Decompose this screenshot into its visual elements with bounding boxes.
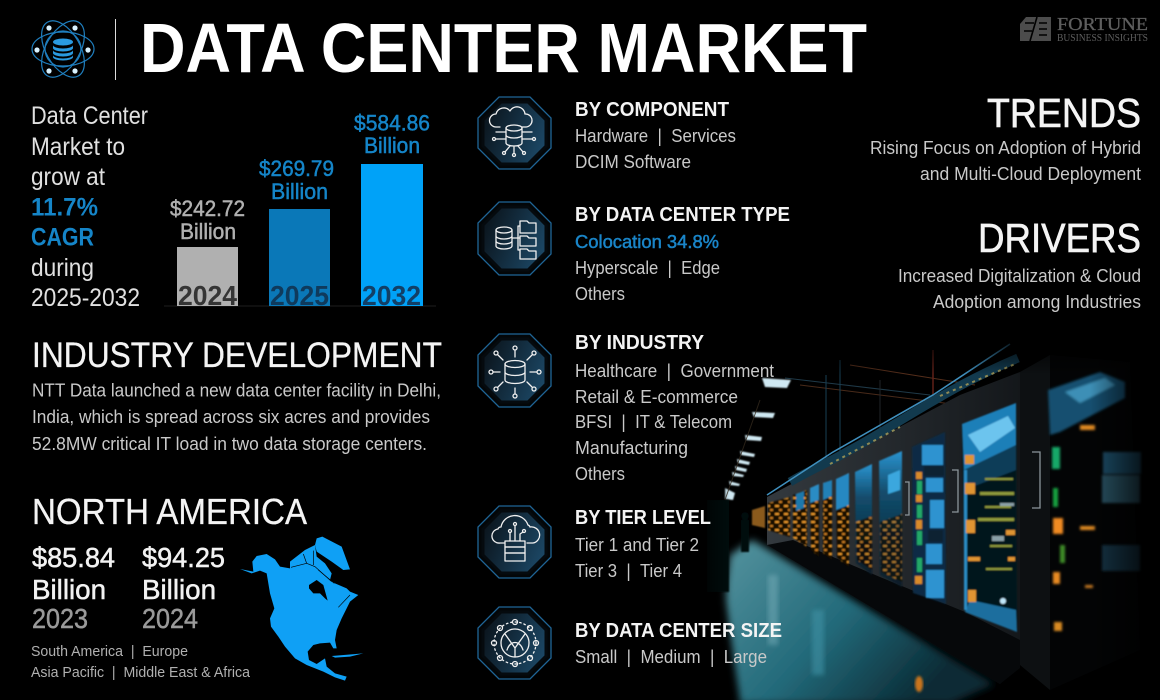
items: Tier 1 and Tier 2 xyxy=(575,535,699,555)
blurred foreground rack xyxy=(1048,372,1141,631)
stat 2023: Billion xyxy=(32,574,106,605)
stat 2023: 2023 xyxy=(32,603,88,634)
bar 2032 xyxy=(354,110,430,311)
panel: drivers xyxy=(898,215,1141,312)
body text: India, which is spread across six acres and provides xyxy=(32,407,430,427)
photo edge fades xyxy=(690,335,1160,700)
CAGR text block xyxy=(31,102,148,312)
body text xyxy=(870,138,1141,184)
far racks with orange lights xyxy=(752,497,790,537)
stat 2024: Billion xyxy=(142,574,216,605)
bar 2032: Billion xyxy=(364,133,420,158)
bar 2025 xyxy=(259,156,334,311)
panel: by data center type xyxy=(478,202,790,304)
heading: NORTH AMERICA xyxy=(32,491,307,532)
items xyxy=(575,361,774,484)
stat 2023 xyxy=(32,542,115,634)
people silhouettes xyxy=(707,500,749,592)
panel: north america xyxy=(31,491,363,681)
logo icon: atom with database xyxy=(32,14,94,84)
icon: cloud server xyxy=(478,506,551,578)
heading: DRIVERS xyxy=(978,215,1141,261)
icon: database folders xyxy=(478,202,551,275)
bar 2024: 2024 xyxy=(178,280,237,311)
items: Manufacturing xyxy=(575,438,688,458)
stat 2024: 2024 xyxy=(142,603,198,634)
heading: TRENDS xyxy=(987,90,1141,136)
bar 2025: Billion xyxy=(271,179,328,204)
bar chart: market size xyxy=(164,110,436,311)
body text: and Multi-Cloud Deployment xyxy=(920,164,1141,184)
panel: by component xyxy=(478,97,736,172)
large panel xyxy=(962,403,1017,632)
heading: BY INDUSTRY xyxy=(575,331,704,354)
items: Healthcare | Government xyxy=(575,361,774,381)
door panels xyxy=(793,403,1017,632)
icon: network globe xyxy=(478,607,551,679)
door handles xyxy=(905,452,1040,515)
body text: NTT Data launched a new data center facility in Delhi, xyxy=(32,380,441,400)
CAGR text block: during xyxy=(31,254,94,282)
items: Hyperscale | Edge xyxy=(575,258,720,278)
items: Small | Medium | Large xyxy=(575,647,767,667)
heading: BY DATA CENTER TYPE xyxy=(575,203,790,226)
CAGR text block: 11.7% xyxy=(31,194,98,222)
brand logo: Fortune Business Insights: FORTUNE xyxy=(1057,14,1148,34)
panel: by industry xyxy=(478,331,774,484)
floor xyxy=(724,540,994,700)
bar 2024 xyxy=(170,196,245,311)
body text: Increased Digitalization & Cloud xyxy=(898,266,1141,286)
body text xyxy=(898,266,1141,312)
heading: BY COMPONENT xyxy=(575,98,729,121)
bar 2032: 2032 xyxy=(362,280,421,311)
server rack body xyxy=(767,372,1020,684)
items xyxy=(575,258,720,304)
stat 2024 xyxy=(142,542,225,634)
photo: data center aisle xyxy=(690,335,1160,700)
title: DATA CENTER MARKET xyxy=(140,9,867,87)
heading: INDUSTRY DEVELOPMENT xyxy=(32,336,442,375)
CAGR text block: CAGR xyxy=(31,224,94,252)
items xyxy=(575,126,736,172)
bar 2032: $584.86 xyxy=(354,110,430,136)
ceiling lights xyxy=(725,378,791,500)
panel: trends xyxy=(870,90,1141,184)
panel: by data center size xyxy=(478,607,782,679)
stat 2023: $85.84 xyxy=(32,542,115,573)
panel: industry development xyxy=(32,336,442,454)
title divider xyxy=(115,19,116,80)
items: Others xyxy=(575,284,625,304)
other regions xyxy=(31,643,251,681)
brand logo: Fortune Business Insights: BUSINESS INSIGHTS xyxy=(1057,33,1148,44)
bar 2025: $269.79 xyxy=(259,156,334,181)
heading: BY DATA CENTER SIZE xyxy=(575,619,782,642)
rack-top cables xyxy=(767,344,1018,495)
CAGR text block: Data Center xyxy=(31,102,148,130)
items: Tier 3 | Tier 4 xyxy=(575,561,682,581)
rack base shadow xyxy=(767,540,1020,684)
items: Others xyxy=(575,464,625,484)
panel second from right xyxy=(912,432,946,604)
bar 2025: 2025 xyxy=(270,280,329,311)
panel: by tier level xyxy=(478,506,711,581)
other regions: Asia Pacific | Middle East & Africa xyxy=(31,664,251,681)
items: Hardware | Services xyxy=(575,126,736,146)
other regions: South America | Europe xyxy=(31,643,188,660)
bar 2024: $242.72 xyxy=(170,196,245,221)
body text xyxy=(32,380,441,454)
ceiling wires xyxy=(725,350,975,500)
body text: Adoption among Industries xyxy=(933,292,1141,312)
CAGR text block: 2025-2032 xyxy=(31,284,140,312)
heading: BY TIER LEVEL xyxy=(575,506,711,529)
icon: cloud database xyxy=(478,97,551,169)
stat 2024: $94.25 xyxy=(142,542,225,573)
items: DCIM Software xyxy=(575,152,691,172)
bar 2024: Billion xyxy=(180,219,236,244)
brand logo: Fortune Business Insights xyxy=(1020,14,1148,44)
items: BFSI | IT & Telecom xyxy=(575,412,732,432)
highlighted share: Colocation 34.8% xyxy=(575,232,719,252)
CAGR text block: Market to xyxy=(31,133,125,161)
items: Retail & E-commerce xyxy=(575,387,738,407)
map: north america xyxy=(240,537,363,681)
items xyxy=(575,535,699,581)
body text: 52.8MW critical IT load in two data storage centers. xyxy=(32,434,427,454)
CAGR text block: grow at xyxy=(31,163,105,191)
icon: database with arrows xyxy=(478,334,551,407)
body text: Rising Focus on Adoption of Hybrid xyxy=(870,138,1141,158)
